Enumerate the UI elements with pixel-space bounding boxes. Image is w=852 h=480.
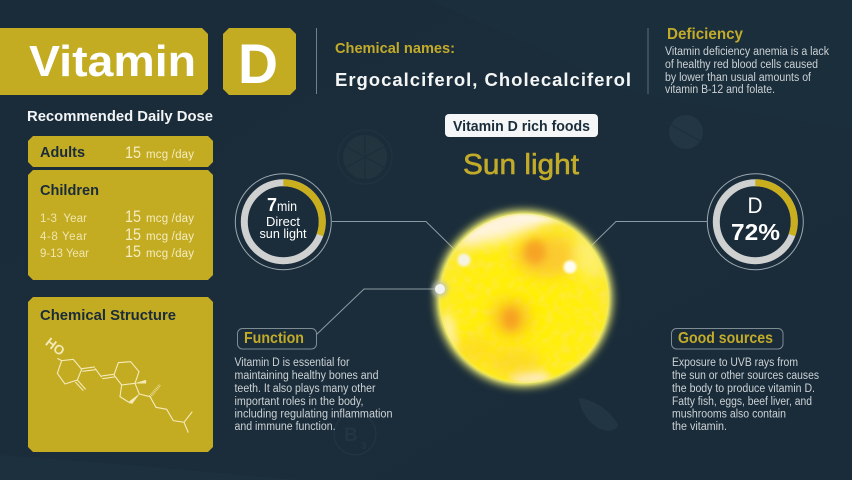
panel: adults dose — [28, 136, 213, 167]
function section: Vitamin D is essential for — [234, 357, 350, 369]
good sources section: the vitamin. — [672, 421, 727, 433]
sun illustration — [425, 190, 613, 388]
icon: faint leaf top right — [666, 115, 703, 149]
function section: including regulating inflammation — [234, 408, 392, 420]
heading: recommended daily dose: Recommended Daily Dose — [27, 108, 213, 125]
food tag: Vitamin D rich foods: Vitamin D rich foods — [453, 119, 590, 135]
deficiency text block: Vitamin deficiency anemia is a lack — [665, 46, 829, 58]
panel: children dose: mcg /day — [146, 213, 194, 225]
title banner: Vitamin: Vitamin — [29, 37, 196, 86]
title badge: D — [223, 28, 296, 95]
gauge: 7 min direct sun light: 7 — [267, 195, 277, 215]
panel: children dose: 1-3 Year — [40, 213, 87, 225]
good sources section: Good sources — [678, 330, 773, 347]
icon: faint lemon — [338, 130, 392, 184]
good sources section: mushrooms also contain — [672, 408, 786, 420]
callout dots on sun — [432, 254, 576, 297]
panel: chemical structure — [28, 297, 213, 452]
panel: children dose: 9-13 Year — [40, 248, 89, 260]
panel: children dose — [28, 170, 213, 280]
icon: faint vitamin B3 badge: B — [344, 425, 358, 446]
panel: chemical structure: Chemical Structure — [40, 307, 176, 324]
gauge: 7 min direct sun light: Direct — [266, 215, 301, 229]
gauge: D 72% — [707, 174, 803, 270]
function section — [234, 328, 392, 433]
panel: children dose: 15 — [125, 207, 141, 226]
function section: teeth. It also plays many other — [234, 383, 376, 395]
panel: children dose: mcg /day — [146, 231, 194, 243]
title banner: Vitamin — [0, 28, 208, 95]
function section: maintaining healthy bones and — [234, 370, 378, 382]
panel: children dose: 15 — [125, 225, 141, 244]
food name: Sun light: Sun light — [463, 149, 579, 181]
panel: children dose: 4-8 Year — [40, 231, 87, 243]
good sources section: Fatty fish, eggs, beef liver, and — [672, 396, 812, 408]
good sources section — [672, 328, 819, 433]
gauge: 7 min direct sun light: sun light — [260, 227, 307, 241]
good sources section: Exposure to UVB rays from — [672, 357, 798, 369]
chemical names: Chemical names: — [335, 40, 455, 57]
food tag: Vitamin D rich foods — [445, 114, 598, 137]
title badge: D: D — [238, 32, 278, 95]
gauge: 7 min direct sun light — [235, 174, 331, 270]
function section: Function — [244, 330, 304, 347]
icon: faint vitamin B3 badge — [334, 413, 376, 455]
panel: adults dose: Adults — [40, 144, 85, 161]
chemical names: Ergocalciferol, Cholecalciferol — [335, 69, 631, 90]
connector lines — [316, 222, 707, 335]
deficiency text block: by lower than usual amounts of — [665, 72, 812, 84]
panel: adults dose: 15 — [125, 143, 141, 162]
gauge: D 72%: 72% — [731, 219, 780, 245]
panel: chemical structure: HO — [43, 335, 68, 359]
panel: children dose: Children — [40, 182, 99, 199]
deficiency text block — [665, 26, 829, 96]
icon: faint vitamin B3 badge: 3 — [361, 441, 367, 452]
function section: important roles in the body, — [234, 396, 364, 408]
chemical names — [335, 40, 631, 90]
function section: and immune function. — [234, 421, 336, 433]
gauge: 7 min direct sun light: min — [277, 199, 297, 214]
deficiency text block: of healthy red blood cells caused — [665, 59, 818, 71]
icon: faint leaf bottom — [579, 398, 618, 431]
deficiency text block: Deficiency — [667, 26, 743, 43]
deficiency text block: vitamin B-12 and folate. — [665, 84, 775, 96]
good sources section: the body to produce vitamin D. — [672, 383, 815, 395]
gauge: D 72%: D — [748, 193, 762, 218]
panel: children dose: 15 — [125, 242, 141, 261]
panel: adults dose: mcg /day — [146, 149, 194, 161]
good sources section: the sun or other sources causes — [672, 370, 819, 382]
panel: children dose: mcg /day — [146, 248, 194, 260]
